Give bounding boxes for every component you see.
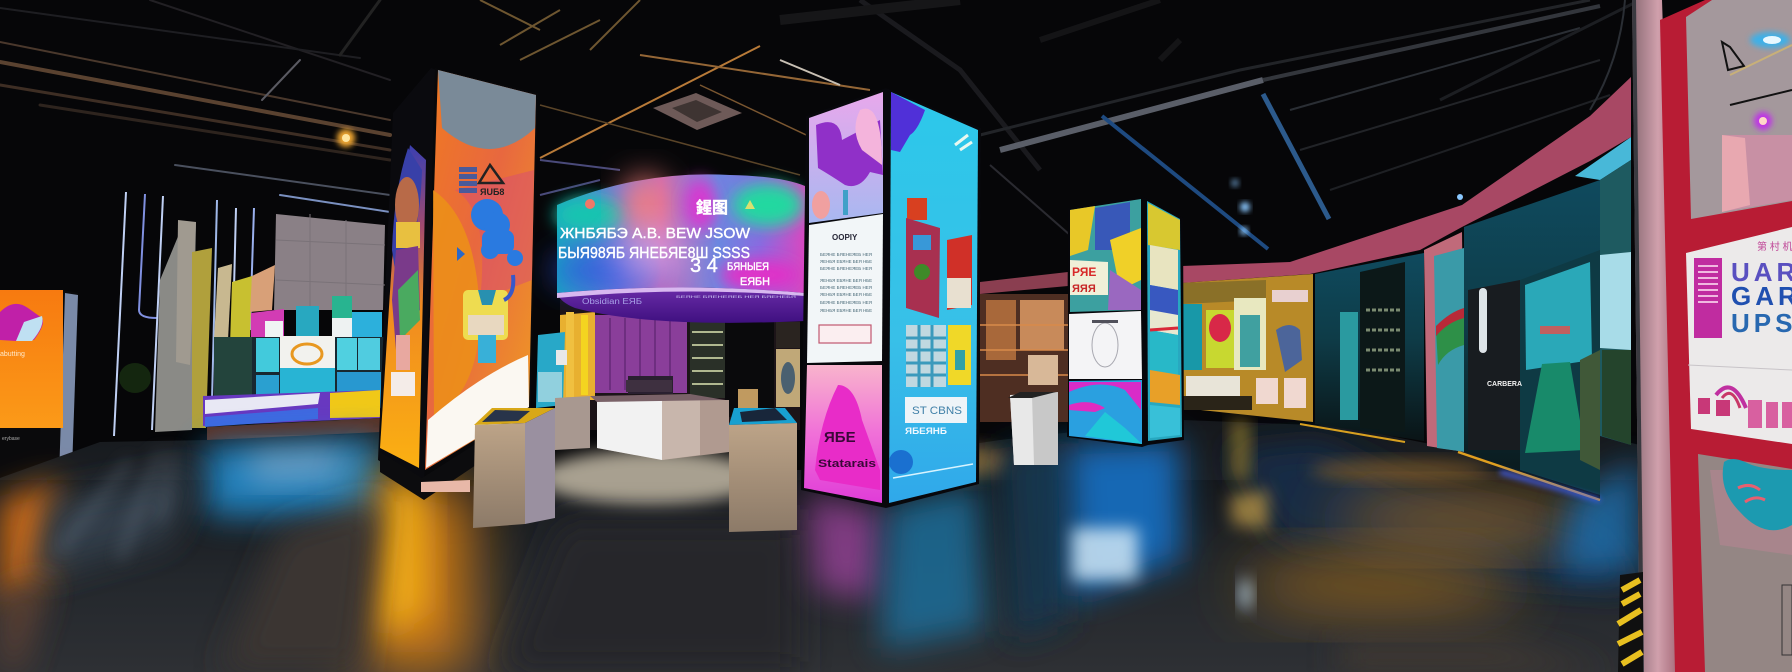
screen: collage panel: РЯЕ: [1072, 265, 1096, 279]
drum underside: purple band: [557, 288, 805, 323]
screen: white text panel: БЕЯНЕ БЯЕНЕЯЕБ НЕЯ: [820, 300, 872, 305]
drum underside: purple band: БЕЯНЕ БЯЕНЕЯЕБ НЕЯ БЯЕНЕБЯ: [676, 294, 796, 299]
left screen: orange: [0, 290, 78, 480]
left screen: orange: erybase: [2, 436, 20, 442]
back wall: lit shelving and door: [690, 322, 800, 417]
back wall: purple panel: [560, 300, 800, 430]
neon vertical lines: [114, 192, 254, 436]
screen: magenta panel: ЯБЕ: [824, 429, 856, 446]
tower: centre, screens: [801, 88, 981, 508]
screen: patterned side panel: [1147, 201, 1182, 441]
floor: [0, 420, 1640, 672]
kiosk: white by tower: [1008, 392, 1058, 465]
screen: white text panel: [807, 214, 883, 363]
screen: magenta panel: Statarais: [818, 458, 876, 470]
screen: cyan side panel: ST CBNS: [912, 405, 962, 417]
tower: left, front face: [424, 68, 538, 492]
screen: white text panel: OOPIY: [832, 233, 858, 242]
ceiling vent: square diffuser: [653, 93, 742, 130]
floor reflection: amber pools: [1230, 420, 1640, 672]
floor reflection: pillar screens: [806, 440, 1252, 650]
screen: collage panel: ЯЯЯ: [1072, 283, 1096, 295]
screen: magenta panel: [804, 365, 882, 503]
screen: white text panel: ЯЕНБЯ ЕБЯНЕ БЕЯ НБЕ: [820, 308, 872, 313]
left screen: orange: abutting: [0, 351, 25, 358]
tower graphic: logo: [459, 165, 504, 197]
back display: shelves behind centre: [980, 294, 1068, 422]
ceiling: centre orange grid: [480, 0, 1040, 195]
wall: pale partitions behind shelf: [155, 214, 385, 432]
pillar: pink with teal inset: [1424, 232, 1466, 452]
drum text: headline: 3 4: [690, 255, 718, 277]
screen: cyan side panel: [889, 92, 978, 503]
pillar: right pale frame: [1632, 0, 1684, 672]
drum text: headline: ЕЯБН: [740, 276, 770, 288]
tower: left, side face: [378, 68, 437, 490]
drum underside: purple band: Obsidian ЕЯБ: [582, 297, 642, 306]
door panel: poster with headline: [1686, 227, 1792, 444]
drum text: headline: БЫЯ98ЯБ ЯНЕБЯЕ8Ш SSSS: [558, 245, 750, 262]
tower graphic: logo: ЯUБ8: [480, 187, 504, 197]
floor reflection: centre: [500, 446, 1010, 672]
hazard stripes: [1618, 572, 1643, 672]
drum text: headline: [558, 198, 770, 288]
floor reflection: left blue and orange: [0, 438, 378, 672]
screen: white text panel: ЯЕНБЯ ЕБЯНЕ БЕЯ НБЕ: [820, 278, 872, 283]
wall: large glass storefront: CARBERA: [1487, 381, 1522, 388]
tower: far right, colourful screens: [1067, 197, 1184, 447]
tower graphic: yellow robot: [463, 275, 513, 363]
ceiling spotlights: blue: [1231, 179, 1463, 235]
drum text: headline: 鍟图: [696, 198, 728, 217]
wall: yellow poster display: [1182, 274, 1313, 422]
screen: magenta and teal swirl: [1069, 380, 1142, 444]
kiosk: left: [473, 408, 555, 528]
screen: lilac art panel: [809, 92, 883, 223]
teal signage: behind left tower: [536, 332, 567, 408]
door panel: lower with teal blob: [1698, 454, 1792, 672]
drum screen: circular LED banner: [550, 174, 805, 323]
plant: left: [119, 363, 151, 393]
screen: cyan side panel: ЯБЕЯНБ: [905, 426, 948, 436]
tower: left, base: [380, 410, 531, 500]
screen: white text panel: ЯЕНБЯ ЕБЯНЕ БЕЯ НБЕ: [820, 259, 872, 264]
floor reflection: left tower: [220, 470, 470, 672]
wall: dark glass storefront: [1315, 253, 1424, 441]
ceiling lamp: left: [337, 129, 355, 147]
screen: white text panel: ЯЕНБЯ ЕБЯНЕ БЕЯ НБЕ: [820, 292, 872, 297]
tower graphic: blue blob character: [471, 199, 523, 266]
screen: white text panel: БЕЯНЕ БЯЕНЕЯЕБ НЕЯ: [820, 285, 872, 290]
screen: white text panel: БЕЯНЕ БЯЕНЕЯЕБ НЕЯ: [820, 266, 872, 271]
door: red frame: [1660, 0, 1792, 672]
screen: white text panel: БЕЯНЕ БЯЕНЕЯЕБ НЕЯ: [820, 252, 872, 257]
floor LED strip: glass edge: [1300, 424, 1600, 500]
drum text: headline: БЯНЫЕЯ: [727, 261, 769, 273]
wall: bright teal opening at far right: [1575, 137, 1631, 445]
counter: white reception desk: [555, 380, 729, 460]
wall: large glass storefront: [1464, 180, 1600, 500]
drum text: headline: ЖНБЯБЭ А.В. BEW JSOW: [560, 225, 751, 242]
screen: white product panel: [1069, 311, 1142, 379]
shelf display: stacked screens: [203, 296, 384, 440]
kiosk: right: [729, 408, 797, 532]
ceiling: left pipes: [0, 0, 390, 212]
door panel: top with reflections: [1686, 0, 1792, 219]
wall: pink soffit band: [980, 77, 1631, 294]
screen: collage panel: [1070, 199, 1141, 312]
door panel: poster with headline: 第 村 机: [1757, 240, 1792, 253]
ceiling: right beams: [980, 0, 1640, 270]
